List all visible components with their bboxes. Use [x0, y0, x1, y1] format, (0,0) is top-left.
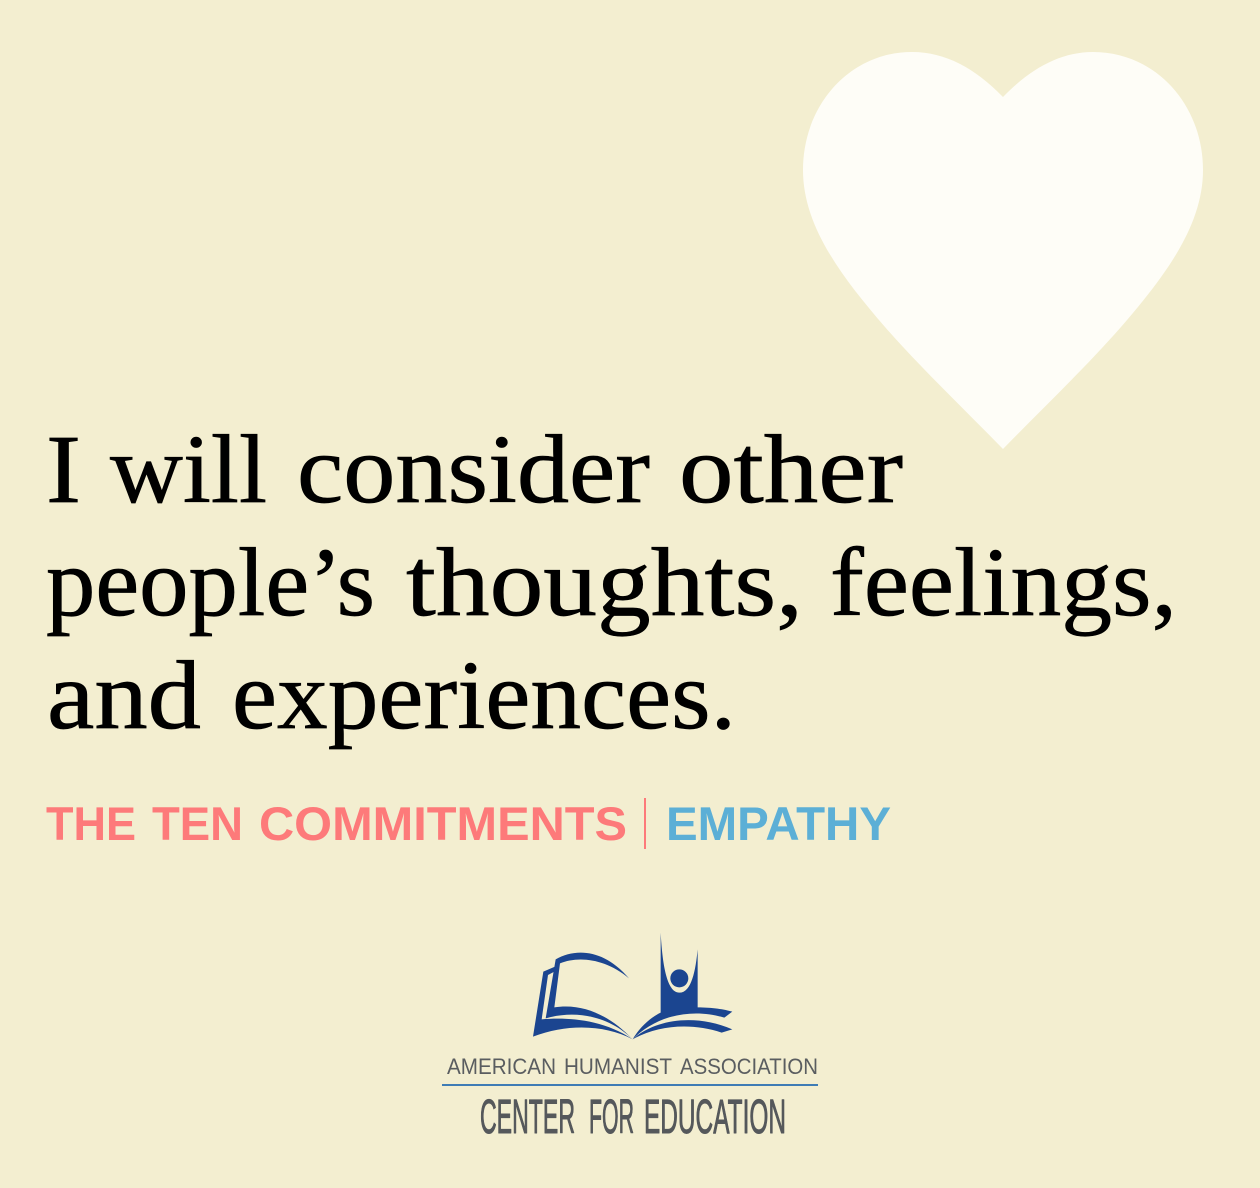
main statement: consider	[297, 416, 650, 524]
tagline: TEN	[152, 797, 243, 850]
center name: EDUCATION	[644, 1091, 786, 1144]
center name: CENTER	[480, 1091, 575, 1144]
organization name: ASSOCIATION	[680, 1054, 818, 1079]
organization name: AMERICAN	[447, 1054, 556, 1079]
organization name: HUMANIST	[564, 1054, 672, 1079]
tagline: COMMITMENTS	[259, 797, 627, 850]
icon: heart	[803, 52, 1203, 449]
main statement: people’s	[46, 529, 375, 637]
center name	[480, 1091, 786, 1144]
center name: FOR	[589, 1091, 634, 1144]
icon: open book with raised figure	[533, 933, 732, 1039]
main statement: I	[46, 416, 81, 524]
tagline: THE	[46, 797, 136, 850]
organization name	[447, 1054, 818, 1079]
logo: American Humanist Association Center for Education	[442, 933, 818, 1144]
main statement: other	[679, 416, 903, 524]
tagline: EMPATHY	[666, 797, 891, 850]
tagline	[46, 797, 891, 850]
main statement	[46, 416, 1177, 750]
main statement: thoughts,	[406, 529, 803, 637]
main statement: will	[110, 416, 267, 524]
main statement: feelings,	[830, 529, 1177, 637]
main statement: and	[47, 642, 201, 750]
main statement: experiences.	[232, 642, 736, 750]
